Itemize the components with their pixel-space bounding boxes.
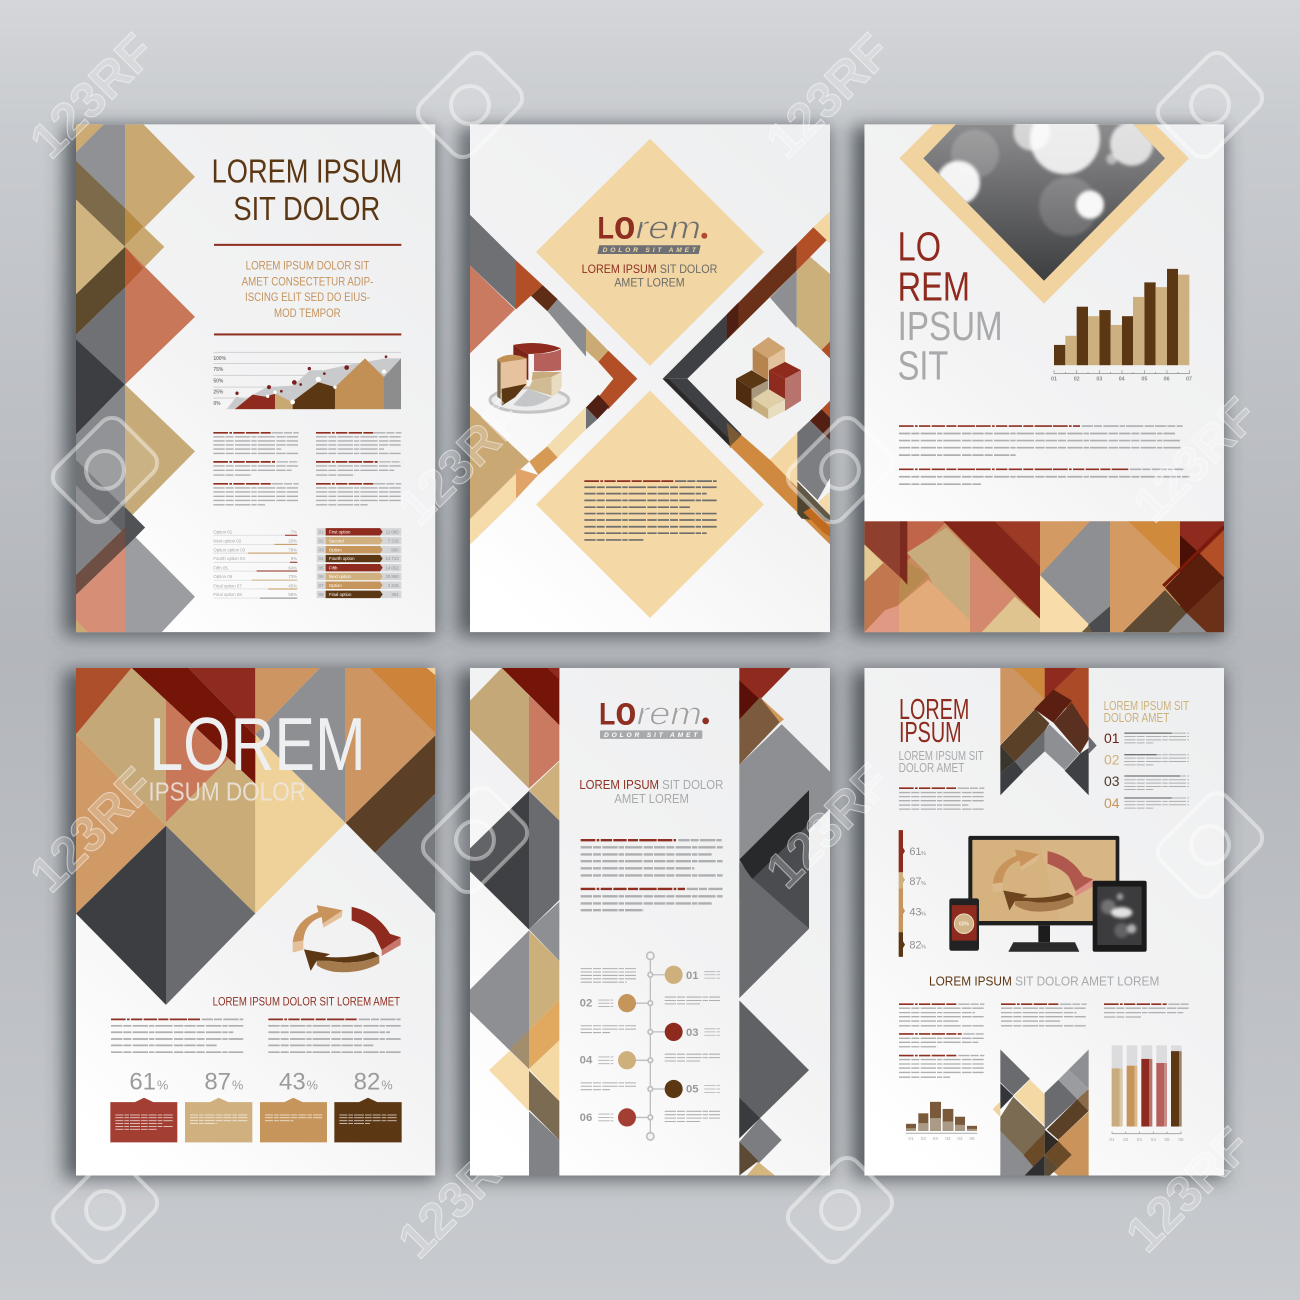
stacked bar chart [906, 1102, 977, 1141]
timeline: 01 [686, 970, 699, 982]
option progress list: Next option 02 [213, 538, 242, 543]
subtitle with rules: AMET CONSECTETUR ADIP- [242, 274, 373, 288]
option table: 800 [391, 547, 399, 552]
numbered list [1104, 698, 1189, 811]
option progress list: Final option 07 [213, 583, 242, 588]
watermark text: 123RF [1115, 1117, 1261, 1263]
area chart [213, 352, 401, 409]
option table: 07 [319, 583, 324, 588]
cylinder bar chart: 01 [1109, 1137, 1115, 1142]
panel: brochure cover B [470, 124, 830, 632]
logo: Lo [599, 689, 636, 733]
numbered list: 04 [1104, 795, 1120, 811]
right pattern [739, 668, 830, 1176]
top diamond [536, 139, 764, 366]
stacked bar chart: 02 [921, 1136, 926, 1141]
vertical percent scale [899, 830, 926, 957]
option table: 361 [391, 592, 399, 597]
title: IPSUM [898, 304, 1003, 349]
option progress list: Fourth option 04 [213, 556, 245, 561]
option table: 4 215 [388, 583, 399, 588]
option table: 03 [319, 547, 324, 552]
title: LO [898, 224, 941, 269]
subtitle: IPSUM DOLOR [148, 778, 306, 806]
stacked bar chart: 06 [969, 1136, 975, 1141]
vertical percent scale: % [921, 944, 926, 950]
bar chart: 04 [1119, 377, 1125, 383]
percentage row: % [157, 1077, 168, 1092]
watermark text: 123RF [755, 23, 901, 169]
title: LOREM IPSUM [212, 153, 402, 190]
watermark text: 123RF [1122, 387, 1268, 533]
title [214, 159, 400, 220]
option progress list: 58% [288, 592, 297, 597]
heading: LOREM IPSUM SIT DOLOR AMET LOREM [929, 973, 1159, 989]
logo: rem [637, 695, 702, 731]
title: REM [898, 264, 970, 309]
page shadows [64, 126, 1224, 1179]
option progress list: 9% [291, 556, 297, 561]
option table [317, 528, 401, 598]
icon: phone: 60% [959, 921, 970, 927]
timeline [580, 952, 720, 1140]
cylinder bar chart [1109, 1045, 1184, 1142]
logo: DOLOR SIT AMET [603, 247, 697, 254]
icon: 3D cubes [736, 337, 801, 419]
title: LOREM [149, 702, 366, 786]
option table: Next option [329, 574, 351, 579]
heading: LOREM IPSUM SIT DOLOR [582, 262, 718, 276]
subtitle left: LOREM IPSUM SIT [899, 748, 984, 763]
bar chart: 03 [1096, 377, 1102, 383]
option progress list: 7% [291, 529, 297, 535]
area chart: 75% [213, 367, 224, 373]
watermark text: 123RF [19, 757, 165, 903]
heading [582, 264, 717, 286]
logo: DOLOR SIT AMET [604, 732, 698, 739]
bottom pattern [993, 1049, 1089, 1177]
vertical percent scale: % [921, 911, 926, 917]
vertical percent scale: 43 [909, 906, 922, 918]
percentage row: 82 [354, 1068, 380, 1095]
percentage row [130, 1072, 392, 1090]
bar chart: 01 [1051, 377, 1057, 383]
panel: brochure cover F [864, 668, 1224, 1177]
icon: tablet [1093, 881, 1147, 952]
subtitle left: DOLOR AMET [899, 760, 964, 775]
option table: Fifth [329, 565, 338, 570]
stacked bar chart: 01 [908, 1136, 914, 1141]
percentage row: % [381, 1077, 393, 1092]
cylinder bar chart: 04 [1151, 1137, 1156, 1142]
vertical percent scale: 87 [909, 876, 922, 888]
option progress list: 20% [288, 538, 297, 543]
option table: 01 [319, 529, 324, 535]
vertical percent scale: 61 [909, 846, 922, 858]
text block [899, 426, 1190, 484]
timeline: 05 [686, 1084, 699, 1096]
option progress list [213, 529, 297, 598]
vertical percent scale: 82 [909, 939, 922, 951]
option table: Fourth option [329, 556, 355, 561]
numbered list: 03 [1104, 773, 1120, 789]
numbered list: 01 [1104, 730, 1120, 746]
option progress list: 79% [288, 547, 297, 552]
diamond photo frame [899, 124, 1189, 304]
heading: AMET LOREM [614, 275, 685, 289]
vertical percent scale: % [921, 851, 926, 857]
title: LOREM [899, 693, 969, 725]
area chart: 50% [213, 378, 224, 384]
option progress list: Fifth 05 [213, 565, 228, 570]
panel: brochure cover E [470, 668, 830, 1176]
title [899, 232, 1000, 380]
bokeh photo [924, 124, 1165, 281]
option table: 08 [319, 592, 324, 597]
watermark text: 123RF [19, 23, 165, 169]
subtitle left [899, 748, 984, 775]
watermark text: 123RF [755, 753, 901, 899]
left pattern [470, 668, 559, 1176]
timeline: 02 [580, 997, 592, 1010]
option table: 06 [319, 574, 324, 579]
option progress list: Option option 03 [213, 547, 246, 552]
numbered list: LOREM IPSUM SIT [1104, 698, 1189, 713]
bar chart: 06 [1164, 377, 1170, 383]
title: SIT [898, 343, 948, 389]
text columns [111, 1019, 401, 1052]
cylinder bar chart: 03 [1137, 1137, 1142, 1142]
subtitle with rules [214, 244, 401, 335]
right pattern [663, 211, 830, 544]
area chart: 25% [213, 390, 224, 396]
title: IPSUM [899, 716, 962, 748]
text block [581, 840, 723, 910]
cylinder bar chart: 05 [1164, 1137, 1170, 1142]
logo: Lo [597, 203, 635, 248]
option table: Second [329, 538, 344, 543]
heading: LOREM IPSUM SIT DOLOR [579, 777, 723, 792]
stacked bar chart: 04 [945, 1136, 951, 1141]
text block [584, 481, 717, 540]
top chevron pattern [1000, 668, 1097, 795]
option table: 11 060 [386, 529, 399, 535]
option table: 05 [319, 565, 324, 570]
option progress list: Option 06 [213, 574, 233, 579]
title [899, 693, 969, 748]
subtitle with rules: MOD TEMPOR [274, 306, 341, 320]
text columns [899, 1004, 1189, 1077]
watermark text: 123RF [387, 390, 533, 536]
panel: brochure cover C [864, 103, 1224, 632]
left text block [899, 788, 984, 809]
stacked bar chart: 02 [957, 1136, 963, 1141]
bar chart: 02 [1074, 377, 1080, 383]
option progress list: 73% [288, 574, 297, 579]
subtitle with rules: LOREM IPSUM DOLOR SIT [246, 258, 370, 273]
option table: Final option [329, 592, 352, 597]
numbered list: DOLOR AMET [1104, 710, 1169, 725]
percentage row: 61 [129, 1068, 156, 1095]
geometric side pattern [76, 124, 195, 632]
panel: brochure cover D [76, 668, 435, 1176]
text columns [213, 433, 401, 505]
bottom pattern band [864, 521, 1224, 632]
bar chart: 05 [1141, 377, 1147, 383]
option table: 14 713 [385, 556, 399, 561]
cylinder bar chart: 06 [1178, 1137, 1184, 1142]
top geometric pattern [76, 668, 435, 1005]
bar chart: 07 [1186, 377, 1192, 383]
logo [600, 703, 709, 739]
heading [580, 780, 723, 803]
option progress list: 64% [288, 565, 297, 570]
numbered list: 02 [1104, 751, 1120, 768]
subtitle with rules: ISCING ELIT SED DO EIUS- [245, 290, 370, 304]
option progress list: Option 01 [213, 529, 233, 535]
option table: Option [329, 547, 342, 552]
option table: First option [329, 529, 351, 535]
timeline: 04 [580, 1055, 593, 1067]
icon: monitor with cycle arrows [968, 836, 1119, 952]
icon: 3D pie chart [490, 343, 569, 412]
info boxes [110, 1098, 402, 1142]
bottom diamond [536, 391, 764, 618]
logo [597, 217, 708, 254]
bar chart [1051, 269, 1192, 383]
timeline: 03 [686, 1027, 699, 1039]
area chart: 0% [213, 401, 221, 407]
option table: 02 [319, 538, 324, 543]
option table: 7 215 [388, 538, 399, 543]
option progress list: 45% [288, 583, 297, 588]
vertical percent scale: % [921, 881, 926, 887]
option table: 14 052 [385, 565, 399, 570]
logo: rem [636, 209, 701, 245]
left pattern [470, 215, 637, 544]
area chart: 100% [213, 356, 227, 362]
percentage row: 43 [279, 1068, 306, 1095]
heading: LOREM IPSUM DOLOR SIT LOREM AMET [213, 994, 400, 1009]
watermark text: 123RF [387, 1123, 533, 1269]
stacked bar chart: 03 [933, 1136, 938, 1141]
icon: phone [949, 898, 979, 951]
panel: brochure cover A [76, 124, 435, 632]
timeline: 06 [580, 1112, 592, 1124]
icon: cycle arrows [293, 905, 401, 972]
option table: Option [329, 583, 342, 588]
percentage row: % [232, 1077, 243, 1092]
percentage row: 87 [204, 1068, 231, 1095]
cylinder bar chart: 02 [1123, 1137, 1129, 1142]
option table: 20 950 [385, 574, 399, 579]
option table: 04 [319, 556, 324, 561]
option progress list: Final option 08 [213, 592, 242, 597]
title: SIT DOLOR [233, 191, 380, 228]
percentage row: % [307, 1077, 318, 1092]
heading: AMET LOREM [614, 791, 689, 806]
